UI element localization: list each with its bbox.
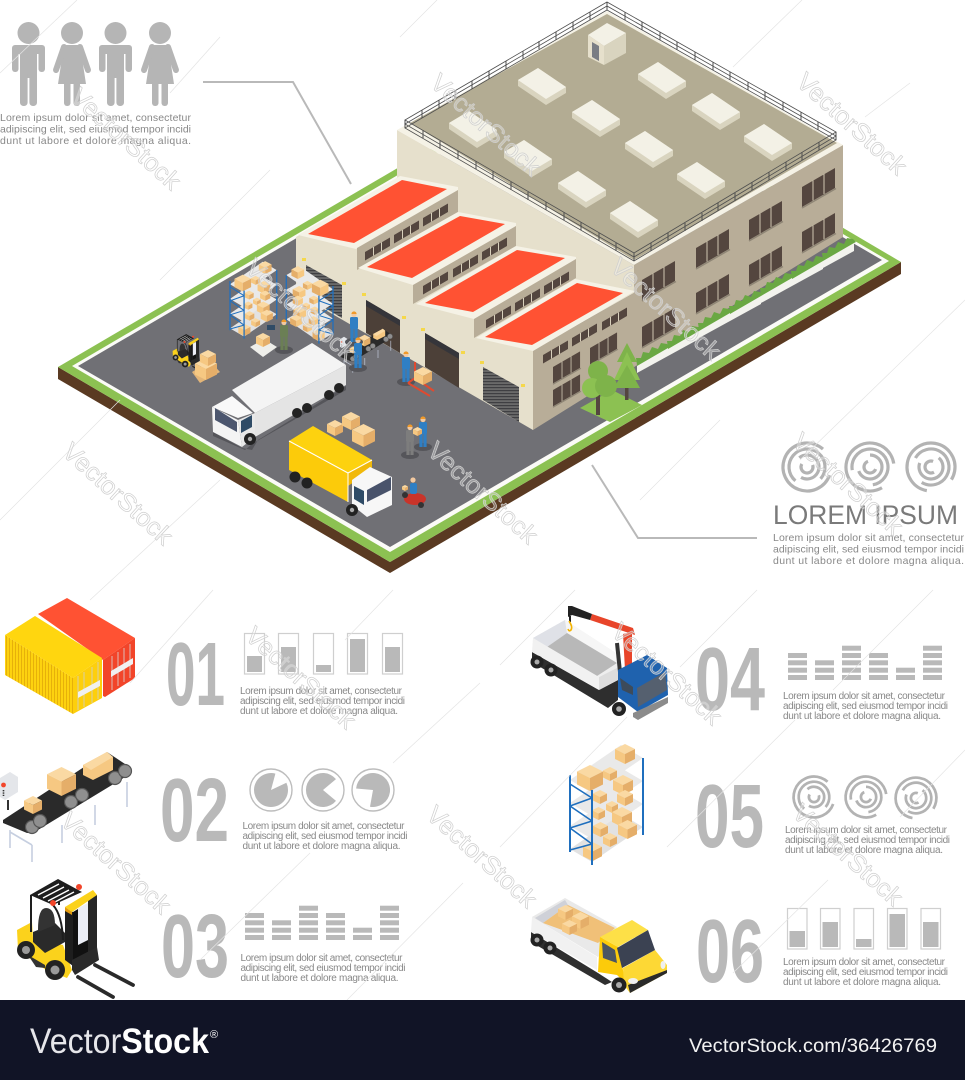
number 06: 06 <box>696 902 764 1002</box>
text block 02: Lorem ipsum dolor sit amet, consectetur <box>242 821 405 832</box>
text block 02: adipiscing elit, sed eiusmod tempor incidi <box>242 831 408 842</box>
text block 04: dunt ut labore et dolore magna aliqua. <box>783 711 941 722</box>
rooftop skylights <box>449 62 792 238</box>
leader lines <box>203 82 757 538</box>
text block 02: dunt ut labore et dolore magna aliqua. <box>242 841 400 852</box>
icon: spirals top right <box>776 434 959 500</box>
shed roof 3 <box>416 246 576 338</box>
chart: equalizer 03 <box>245 906 399 940</box>
yard boxes <box>327 412 375 447</box>
number 01: 01 <box>166 625 225 725</box>
number 02: 02 <box>160 761 229 861</box>
text block 05: Lorem ipsum dolor sit amet, consectetur <box>785 825 948 836</box>
text block: top right: adipiscing elit, sed eiusmod tempor incidi <box>773 544 964 556</box>
text block 04: Lorem ipsum dolor sit amet, consectetur <box>783 691 946 702</box>
ground plot <box>58 67 901 573</box>
dock doors <box>306 265 519 422</box>
watermark overlay: VectorStock <box>606 617 727 731</box>
roof access hut <box>588 23 626 65</box>
icon: shipping containers <box>5 598 135 714</box>
footer url: VectorStock.com/36426769 <box>689 1036 937 1057</box>
yard forklift <box>173 334 220 383</box>
text block: top left: dunt ut labore et dolore magna aliqua. <box>0 135 191 147</box>
footer logo: ® <box>210 1029 218 1041</box>
planters <box>636 238 856 373</box>
watermark overlay: VectorStock <box>240 621 361 735</box>
shed roof 1 <box>298 176 458 270</box>
icon: yellow flatbed truck <box>530 898 667 993</box>
icon: woman <box>144 22 176 106</box>
text block: top right: dunt ut labore et dolore magna aliqua. <box>773 555 964 567</box>
text block 03: dunt ut labore et dolore magna aliqua. <box>240 973 398 984</box>
text block 03: adipiscing elit, sed eiusmod tempor incidi <box>240 963 406 974</box>
wall lights <box>302 258 525 387</box>
chart: spirals 05 <box>788 769 940 825</box>
watermark overlay: VectorStock <box>787 427 908 541</box>
watermark overlay: VectorStock <box>787 798 908 912</box>
text block 01: adipiscing elit, sed eiusmod tempor incidi <box>240 696 405 707</box>
chart: bars 06 <box>788 908 940 949</box>
text block 05: dunt ut labore et dolore magna aliqua. <box>785 845 943 856</box>
icon: conveyor <box>0 752 132 862</box>
number 04: 04 <box>695 630 765 730</box>
footer logo: VectorStock <box>30 1022 209 1061</box>
icon: crane truck <box>530 606 668 720</box>
small conveyor <box>340 329 393 373</box>
watermark overlay: VectorStock <box>605 252 726 366</box>
scooter courier <box>402 477 426 508</box>
text block 01: dunt ut labore et dolore magna aliqua. <box>240 706 398 717</box>
pallet racks <box>230 261 333 344</box>
wall windows <box>553 168 836 407</box>
footer band <box>0 1000 965 1080</box>
icon: forklift <box>17 879 133 997</box>
white truck <box>212 343 346 450</box>
text block: top left: Lorem ipsum dolor sit amet, consectetur <box>0 112 192 124</box>
workers <box>275 311 432 459</box>
icon: storage rack <box>570 744 643 865</box>
shed roof 4 <box>476 279 635 364</box>
text block: top right: Lorem ipsum dolor sit amet, consectetur <box>773 532 964 544</box>
watermark overlay: VectorStock <box>425 68 546 182</box>
text block 06: Lorem ipsum dolor sit amet, consectetur <box>783 957 946 968</box>
yellow truck <box>289 426 392 517</box>
text block: top left: adipiscing elit, sed eiusmod tempor incidi <box>0 124 191 136</box>
roof railing <box>405 2 836 261</box>
text block 01: Lorem ipsum dolor sit amet, consectetur <box>240 686 403 697</box>
text block 04: adipiscing elit, sed eiusmod tempor incidi <box>783 701 948 712</box>
text block 05: adipiscing elit, sed eiusmod tempor incidi <box>785 835 950 846</box>
text block 06: adipiscing elit, sed eiusmod tempor incidi <box>783 967 948 978</box>
text block 06: dunt ut labore et dolore magna aliqua. <box>783 977 941 988</box>
heading: lorem ipsum: LOREM IPSUM <box>773 500 958 530</box>
icon: man <box>99 22 132 106</box>
pallet truck <box>408 362 434 396</box>
watermark overlay: VectorStock <box>55 806 176 920</box>
watermark overlay: VectorStock <box>240 253 361 367</box>
chart: bars 01 <box>244 634 402 674</box>
icon: man <box>12 22 45 106</box>
floor scale <box>250 325 277 357</box>
icon: woman <box>56 22 88 106</box>
shed roof 2 <box>358 212 516 304</box>
flat roof <box>397 2 843 265</box>
watermark overlay: VectorStock <box>65 82 186 196</box>
number 03: 03 <box>161 897 229 997</box>
trees <box>580 343 642 422</box>
chart: equalizer 04 <box>788 646 942 680</box>
watermark overlay: VectorStock <box>791 67 912 181</box>
watermark overlay: VectorStock <box>421 800 542 914</box>
number 05: 05 <box>695 767 764 867</box>
chart: pies <box>250 769 394 811</box>
people icons <box>12 22 176 106</box>
text block 03: Lorem ipsum dolor sit amet, consectetur <box>240 953 403 964</box>
watermark overlay: VectorStock <box>422 436 543 550</box>
watermark overlay: VectorStock <box>57 437 178 551</box>
warehouse building <box>173 2 856 517</box>
